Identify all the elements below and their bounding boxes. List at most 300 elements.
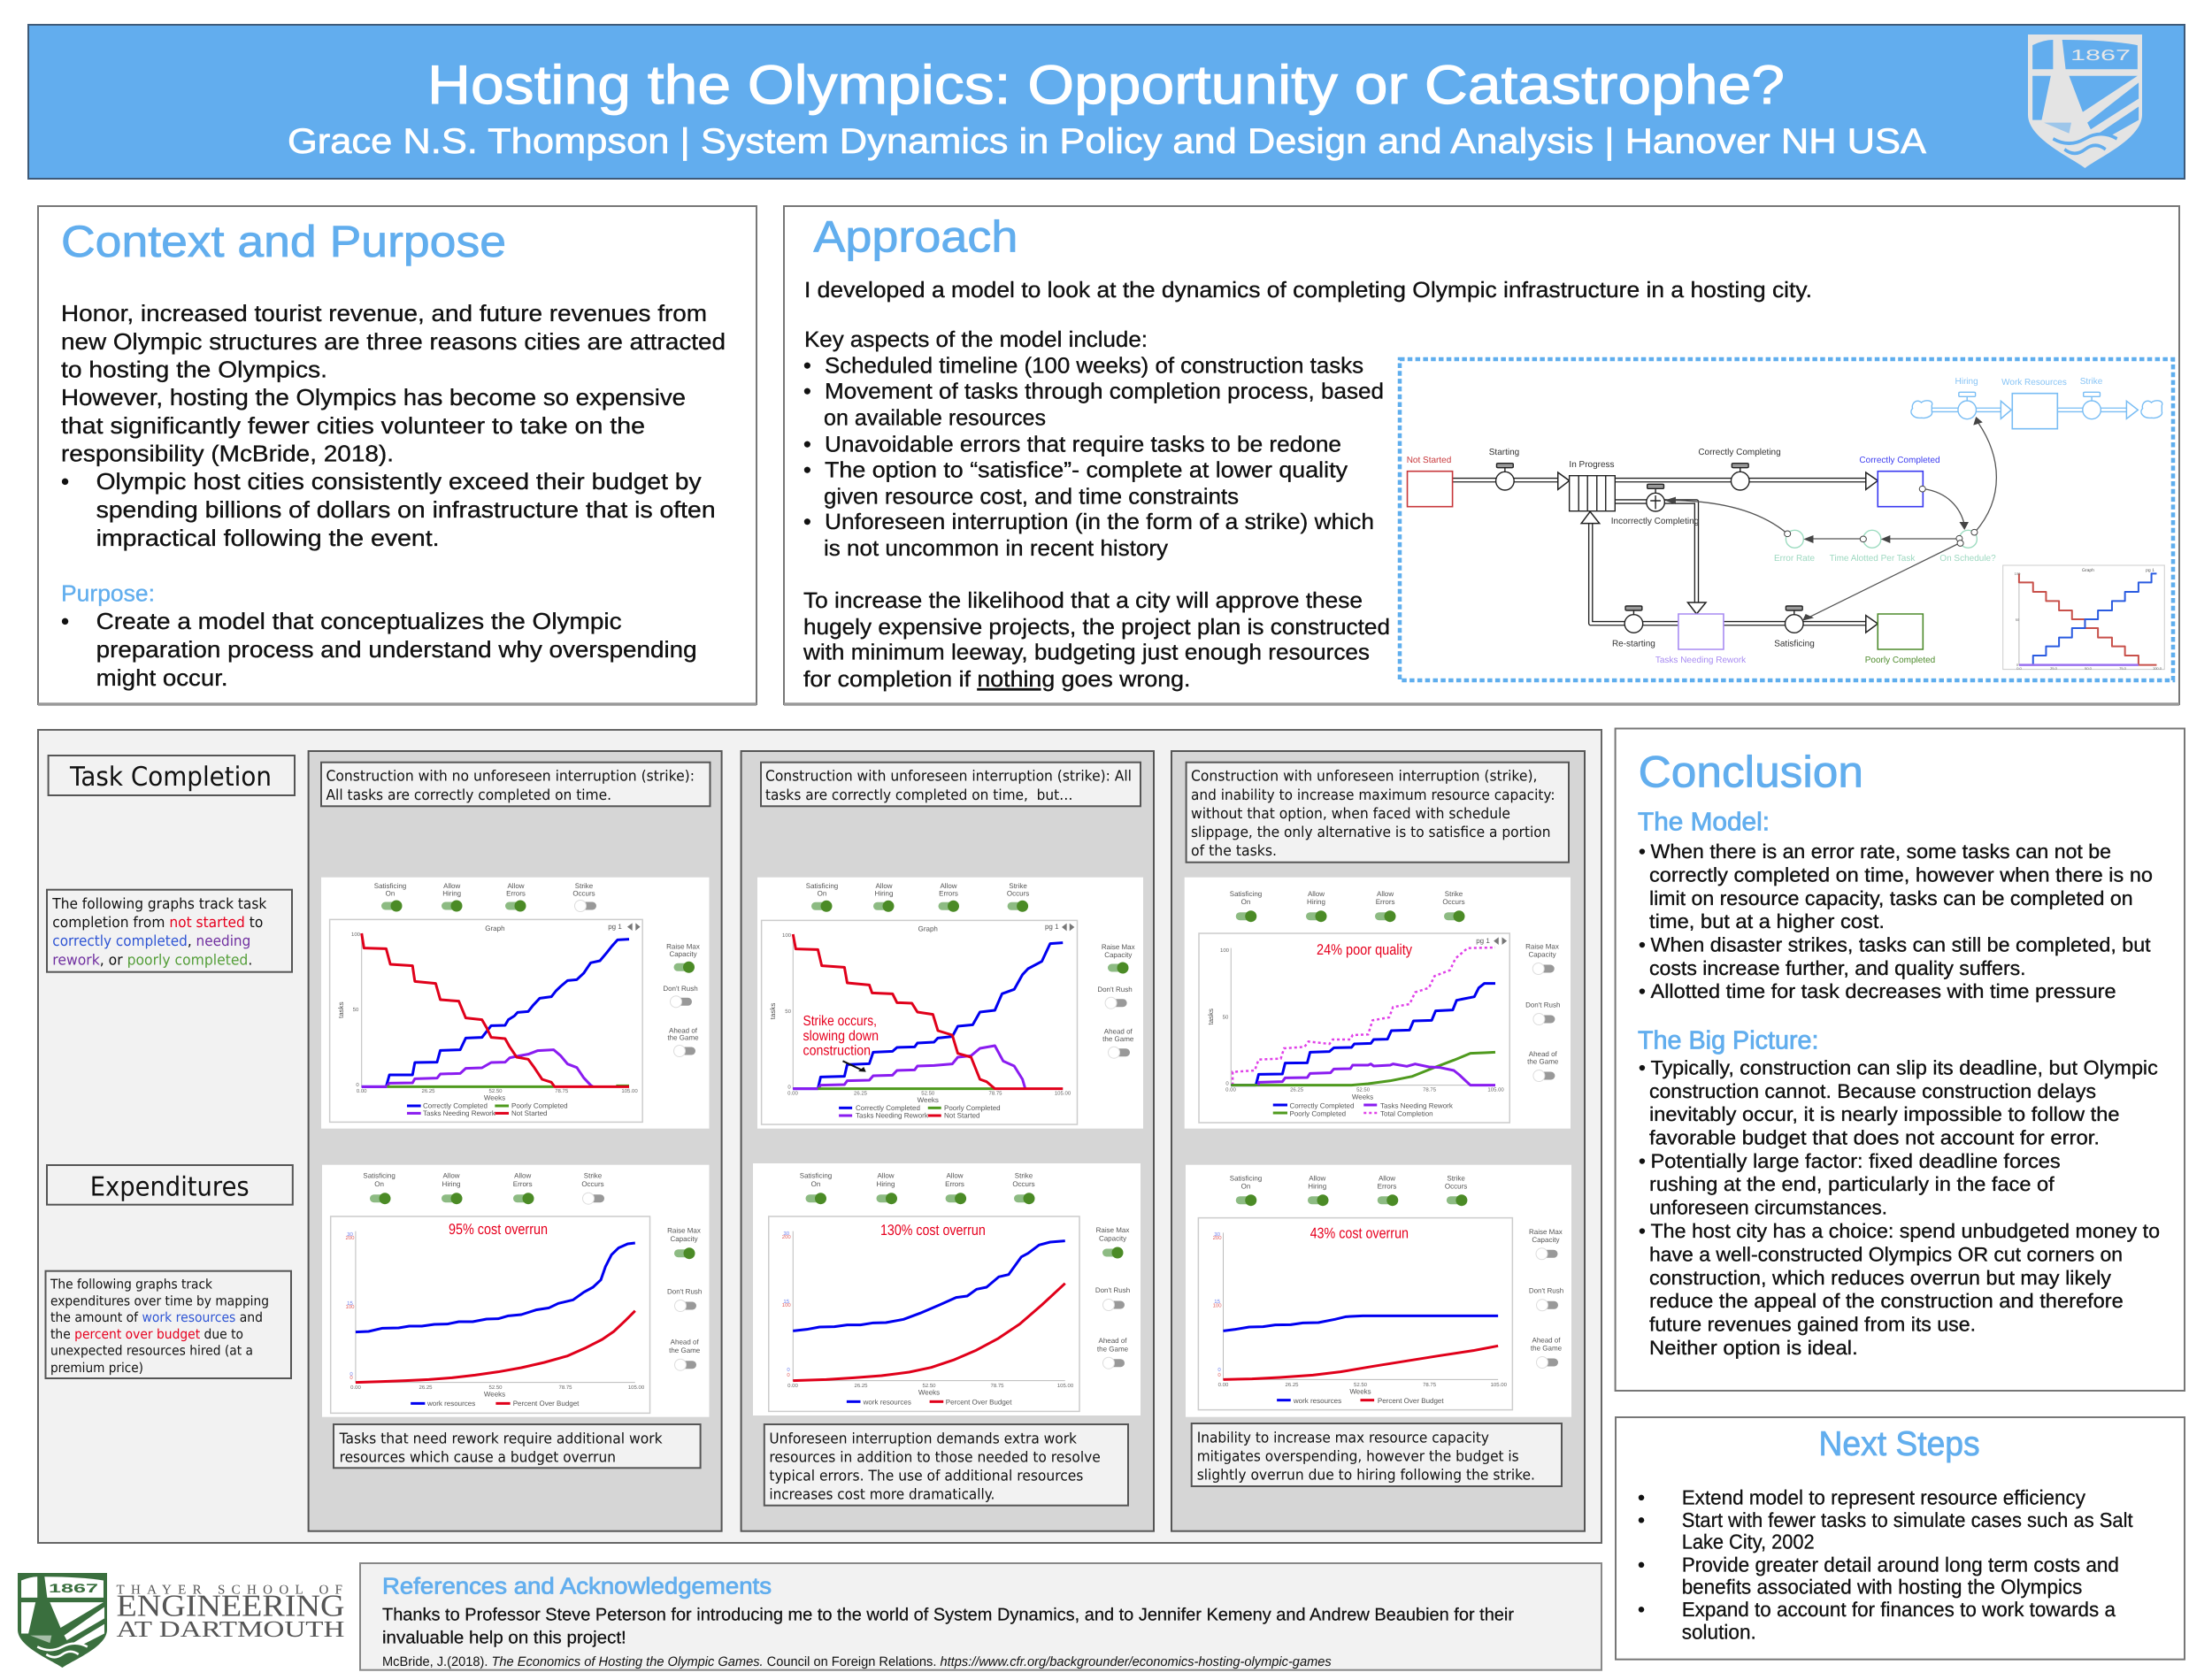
context text: Olympic host cities consistently exceed their budget by <box>96 468 702 495</box>
approach text: To increase the likelihood that a city will approve these <box>803 588 1363 613</box>
graph labels: Correctly Completed <box>856 1104 920 1112</box>
graph labels: 50 <box>353 1007 359 1013</box>
graph labels: Correctly Completed <box>423 1102 488 1110</box>
panel: results <box>38 730 1601 1543</box>
big picture bullets: reduce the appeal of the construction and therefore <box>1649 1290 2124 1312</box>
diagram labels: Hiring <box>1955 377 1978 387</box>
conveyor: in progress <box>1570 476 1615 511</box>
next steps bullets: • <box>1638 1508 1645 1531</box>
approach text: given resource cost, and time constraints <box>824 484 1239 509</box>
next steps bullets: Provide greater detail around long term costs and <box>1682 1553 2119 1576</box>
plotted lines <box>1198 1218 1512 1410</box>
diagram labels: 50 <box>2016 618 2020 622</box>
valves <box>1496 464 1803 633</box>
connector arrowheads <box>1664 417 1983 621</box>
connectors <box>1675 422 1996 617</box>
graph labels: work resources <box>1293 1397 1341 1405</box>
chart: tasks no strike <box>321 878 710 1129</box>
graph labels: 30 <box>347 1231 353 1238</box>
graph labels: 100 <box>345 1304 355 1310</box>
graph labels: 105.00 <box>1055 1091 1071 1097</box>
graph labels: pg 1 <box>1045 923 1059 931</box>
caption: capacity mitigates: mitigates overspending, however the budget is <box>1197 1448 1519 1465</box>
panel: conclusion <box>1616 729 2185 1391</box>
graph labels <box>1213 1231 1508 1405</box>
next steps bullets: • <box>1638 1486 1645 1509</box>
note: task completion: The following graphs track task <box>51 895 267 912</box>
context text: new Olympic structures are three reasons cities are attracted <box>61 328 726 355</box>
graph labels: 105.00 <box>1057 1383 1074 1389</box>
annotation: strike occurs: construction <box>803 1044 871 1059</box>
wordmark: THAYER SCHOOL OF <box>117 1584 342 1598</box>
big picture bullets: unforeseen circumstances. <box>1649 1197 1887 1219</box>
diagram labels: pg 1 <box>2146 568 2154 573</box>
next steps bullets: Expand to account for finances to work towards a <box>1682 1598 2116 1621</box>
graph labels: 105.00 <box>621 1088 638 1094</box>
graph labels: 30 <box>783 1231 790 1237</box>
graph labels: Poorly Completed <box>944 1104 1001 1112</box>
icon: green shield: 1867 <box>49 1581 98 1595</box>
graph labels: 200 <box>1213 1235 1222 1241</box>
graph labels: 52.50 <box>1356 1086 1371 1093</box>
diagram labels: Tasks Needing Rework <box>1655 656 1747 665</box>
toggle controls: Errors <box>1376 898 1394 906</box>
diagram labels: Work Resources <box>2001 378 2067 387</box>
approach text: • <box>803 354 811 379</box>
toggle controls: the Game <box>669 1346 701 1354</box>
toggle controls: Hiring <box>1308 1182 1326 1190</box>
graph labels: tasks <box>337 1001 345 1018</box>
context text: • <box>61 468 69 495</box>
graph labels: 0 <box>1217 1372 1221 1378</box>
graph labels: Percent Over Budget <box>946 1398 1012 1406</box>
graph labels: 200 <box>345 1235 355 1241</box>
panel: column no strike <box>309 751 722 1531</box>
toggle controls: Raise Max <box>1529 1228 1563 1236</box>
heading: task completion <box>49 756 295 795</box>
graph labels: pg 1 <box>1476 937 1490 945</box>
toggle controls: Satisficing <box>1230 1174 1262 1182</box>
graph labels <box>782 1231 1074 1406</box>
toggle controls: Allow <box>507 882 525 890</box>
toggle controls: Occurs <box>1012 1180 1035 1188</box>
heading: expenditures <box>47 1165 293 1205</box>
graph labels: Correctly Completed <box>1290 1101 1354 1109</box>
toggle controls: Ahead of <box>671 1339 699 1346</box>
toggle controls: Allow <box>1309 1174 1326 1182</box>
graph labels: 0.00 <box>357 1088 367 1094</box>
inset graph <box>2003 565 2164 670</box>
icon: college shield: 1867 <box>2070 47 2131 64</box>
purpose text: preparation process and understand why overspending <box>96 636 697 663</box>
toggle controls <box>800 1172 1130 1369</box>
graph labels: 52.50 <box>488 1088 503 1094</box>
diagram labels: Satisficing <box>1774 640 1815 649</box>
caption: no strike <box>321 763 710 806</box>
context text: to hosting the Olympics. <box>61 356 327 382</box>
diagram labels: Starting <box>1489 448 1519 457</box>
chart: tasks strike <box>757 878 1143 1129</box>
heading: task completion: Task Completion <box>69 762 272 793</box>
annotation: strike occurs: slowing down <box>803 1029 879 1044</box>
big picture bullets: construction, which reduces overrun but may likely <box>1649 1267 2112 1289</box>
graph labels: Not Started <box>944 1112 979 1120</box>
approach text: • <box>803 432 811 456</box>
chart: cost no strike <box>322 1165 710 1417</box>
next steps bullets: benefits associated with hosting the Olympics <box>1682 1576 2082 1599</box>
caption: extra resources: increases cost more dramatically. <box>769 1486 995 1503</box>
approach text: I developed a model to look at the dynamics of completing Olympic infrastructure in a hosting city. <box>804 278 1812 303</box>
caption: strike: tasks are correctly completed on time, but… <box>765 786 1072 803</box>
context text: that significantly fewer cities volunteer to take on the <box>61 412 645 439</box>
toggle controls: Strike <box>584 1172 603 1180</box>
note: expenditures: premium price) <box>50 1360 143 1376</box>
toggle controls: Occurs <box>1007 889 1029 897</box>
big picture bullets: • <box>1639 1056 1646 1079</box>
toggle controls: the Game <box>667 1034 699 1042</box>
graph labels: 0 <box>1217 1367 1221 1373</box>
approach text: Unforeseen interruption (in the form of a strike) which <box>825 510 1374 534</box>
graph labels: 0 <box>1225 1081 1229 1087</box>
toggle controls: Allow <box>514 1172 531 1180</box>
caption: no strike: Construction with no unforeseen interruption (strike): <box>326 768 695 785</box>
model bullets: limit on resource capacity, tasks can be completed on <box>1649 887 2133 909</box>
big picture bullets: Neither option is ideal. <box>1649 1337 1858 1359</box>
approach text: The option to “satisfice”- complete at lower quality <box>825 458 1348 483</box>
big picture bullets: The host city has a choice: spend unbudgeted money to <box>1651 1220 2160 1242</box>
toggle controls: the Game <box>1102 1035 1134 1043</box>
graph labels: Weeks <box>1352 1093 1373 1101</box>
approach text: is not uncommon in recent history <box>824 536 1169 561</box>
caption: strike and capacity: slippage, the only alternative is to satisfice a portion <box>1191 824 1550 840</box>
heading: Approach <box>813 212 1018 262</box>
approach text: Movement of tasks through completion process, based <box>825 380 1384 404</box>
graph labels: Weeks <box>1349 1387 1371 1395</box>
heading: Conclusion <box>1639 748 1863 797</box>
subtitle: Grace N.S. Thompson | System Dynamics in Policy and Design and Analysis | Hanover NH USA <box>288 122 1926 161</box>
annotation: 130% cost overrun <box>880 1222 986 1239</box>
caption: strike and capacity: of the tasks. <box>1191 842 1277 859</box>
model bullets: correctly completed on time, however when there is no <box>1649 864 2153 886</box>
approach text: • <box>803 510 811 534</box>
toggle controls: Satisficing <box>1230 890 1262 898</box>
toggle controls: Capacity <box>670 1235 698 1243</box>
graph labels: Tasks Needing Rework <box>423 1109 496 1117</box>
heading: References and Acknowledgements <box>382 1573 772 1599</box>
toggle controls: Allow <box>1308 890 1325 898</box>
next steps bullets: Start with fewer tasks to simulate cases such as Salt <box>1682 1508 2133 1531</box>
diagram labels: Incorrectly Completing <box>1611 517 1699 526</box>
toggle controls: Strike <box>1447 1174 1465 1182</box>
toggle controls: Allow <box>946 1172 964 1180</box>
toggle controls: Don't Rush <box>663 985 698 993</box>
graph labels: 78.75 <box>1423 1382 1437 1388</box>
toggle controls: Errors <box>1378 1182 1396 1190</box>
toggle controls: Errors <box>506 889 526 897</box>
toggle controls: Satisficing <box>363 1172 396 1180</box>
auxiliary variables <box>1786 530 1977 548</box>
toggle controls: the Game <box>1527 1058 1559 1066</box>
toggle controls: On <box>386 889 395 897</box>
approach text: Key aspects of the model include: <box>804 327 1148 352</box>
next steps bullets: • <box>1638 1553 1645 1576</box>
plotted lines <box>331 1216 650 1413</box>
approach text: Scheduled timeline (100 weeks) of construction tasks <box>825 354 1363 379</box>
graph labels: Poorly Completed <box>511 1102 568 1110</box>
model bullets: Allotted time for task decreases with time pressure <box>1651 980 2116 1002</box>
caption: rework: Tasks that need rework require additional work <box>339 1431 663 1447</box>
diagram labels: Time Alotted Per Task <box>1830 554 1916 564</box>
graph labels: 50 <box>785 1009 792 1015</box>
chart: cost strike <box>753 1163 1141 1415</box>
toggle controls: Strike <box>1445 890 1463 898</box>
toggle controls: Hiring <box>442 1180 460 1188</box>
caption: extra resources: resources in addition to those needed to resolve <box>769 1449 1101 1466</box>
caption: strike <box>761 763 1141 806</box>
big picture bullets: have a well-constructed Olympics OR cut corners on <box>1649 1244 2123 1265</box>
graph labels: tasks <box>1207 1009 1215 1025</box>
icon: green shield <box>18 1573 107 1668</box>
diagram labels: 0 <box>2016 663 2019 667</box>
toggle controls: Don't Rush <box>1097 986 1133 993</box>
panel: approach <box>784 206 2179 704</box>
wordmark: AT DARTMOUTH <box>117 1616 345 1642</box>
graph labels: 0.00 <box>350 1385 361 1391</box>
model bullets: • <box>1639 934 1646 956</box>
toggle controls <box>1230 890 1560 1081</box>
toggle controls: Errors <box>513 1180 533 1188</box>
toggle controls: Allow <box>877 1172 895 1180</box>
big picture bullets: inevitably occur, it is nearly impossible to follow the <box>1649 1103 2120 1125</box>
graph labels <box>1207 937 1504 1117</box>
plotted lines <box>330 919 642 1122</box>
graph labels: 26.25 <box>1285 1382 1299 1388</box>
model bullets <box>1639 840 2153 1002</box>
chart: tasks strike capacity <box>1185 878 1571 1129</box>
graph labels: 0.00 <box>787 1383 798 1389</box>
graph labels: 78.75 <box>990 1383 1004 1389</box>
graph labels: 50 <box>1223 1015 1229 1021</box>
resource valves and clouds <box>1911 392 2162 419</box>
graph labels: work resources <box>863 1398 911 1406</box>
graph labels: 105.00 <box>628 1385 645 1391</box>
toggle controls: Occurs <box>581 1180 604 1188</box>
system dynamics model diagram <box>1400 359 2173 680</box>
toggle controls: Ahead of <box>669 1026 698 1034</box>
note: task completion <box>47 890 292 972</box>
toggle controls: Ahead of <box>1532 1337 1561 1345</box>
toggle controls: Satisficing <box>374 882 406 890</box>
graph labels: 100 <box>782 932 792 939</box>
graph labels: Weeks <box>918 1096 939 1104</box>
diagram labels: 0.0 <box>2016 666 2023 671</box>
graph labels: Graph <box>485 924 505 932</box>
graph labels: 0.00 <box>1218 1382 1229 1388</box>
toggle controls: On <box>1241 898 1250 906</box>
purpose text: • <box>61 608 69 634</box>
panel: column strike <box>741 751 1154 1531</box>
annotation: 95% cost overrun <box>449 1221 548 1238</box>
diagram labels: 25.0 <box>2050 666 2058 671</box>
graph labels: 78.75 <box>555 1088 569 1094</box>
approach text: for completion if nothing goes wrong. <box>803 667 1191 692</box>
graph labels: Tasks Needing Rework <box>1380 1101 1454 1109</box>
toggle controls: Raise Max <box>666 943 700 951</box>
wordmark <box>117 1584 345 1642</box>
graph labels <box>337 923 638 1117</box>
toggle controls: Occurs <box>1442 898 1465 906</box>
thanks text: Thanks to Professor Steve Peterson for introducing me to the world of System Dynamics, and to Jennifer Kemeny and Andrew Beaubien for their <box>382 1606 1514 1625</box>
graph labels: 105.00 <box>1487 1086 1504 1093</box>
diagram labels: 100.0 <box>2153 666 2162 671</box>
annotation: strike occurs <box>803 1014 879 1059</box>
next steps bullets: Extend model to represent resource efficiency <box>1682 1486 2085 1509</box>
model bullets: When disaster strikes, tasks can still be completed, but <box>1651 934 2151 956</box>
annotation: 43% cost overrun <box>1310 1224 1409 1241</box>
toggle controls: On <box>811 1180 820 1188</box>
caption: strike and capacity: Construction with unforeseen interruption (strike), <box>1191 768 1538 785</box>
citation: McBride, J.(2018). The Economics of Hosting the Olympic Games. Council on Foreign Relations. https://www.cfr.org/backgrounder/economics-hosting-olympic-games <box>382 1654 1332 1669</box>
approach text: • <box>803 458 811 483</box>
graph labels: Weeks <box>484 1391 505 1399</box>
plotted lines <box>762 920 1078 1124</box>
stocks <box>1408 394 2057 649</box>
toggle controls: Strike <box>575 882 594 890</box>
caption: extra resources: typical errors. The use of additional resources <box>769 1467 1083 1484</box>
context text <box>61 300 726 551</box>
context text: Honor, increased tourist revenue, and future revenues from <box>61 300 707 326</box>
caption: extra resources: Unforeseen interruption demands extra work <box>769 1431 1077 1447</box>
toggle controls <box>1230 1174 1563 1368</box>
graph labels <box>769 923 1071 1120</box>
diagram labels: Graph <box>2082 568 2094 573</box>
graph labels: tasks <box>769 1003 777 1019</box>
toggle controls: Don't Rush <box>667 1287 702 1295</box>
graph labels: 52.50 <box>921 1091 935 1097</box>
toggle controls: Allow <box>940 882 957 890</box>
toggle controls: Hiring <box>1307 898 1325 906</box>
context text: However, hosting the Olympics has become so expensive <box>61 384 686 410</box>
big picture bullets <box>1639 1056 2160 1359</box>
toggle controls: Raise Max <box>667 1227 701 1235</box>
purpose text <box>61 608 697 691</box>
next steps bullets: solution. <box>1682 1621 1756 1644</box>
graph labels: 52.50 <box>488 1385 503 1391</box>
toggle controls: Capacity <box>1104 951 1132 959</box>
chart: cost strike capacity <box>1186 1165 1571 1417</box>
purpose heading: Purpose: <box>61 580 155 607</box>
note: task completion: rework, or poorly completed. <box>52 952 252 969</box>
toggle controls: Hiring <box>442 889 461 897</box>
purpose text: might occur. <box>96 664 228 691</box>
toggle controls: Occurs <box>1445 1182 1467 1190</box>
toggle controls: Allow <box>1377 890 1394 898</box>
plotted lines <box>1199 933 1509 1123</box>
big picture bullets: Potentially large factor: fixed deadline forces <box>1651 1150 2061 1172</box>
graph labels: 105.00 <box>1491 1382 1508 1388</box>
note: expenditures: the percent over budget due to <box>50 1326 243 1342</box>
approach text: hugely expensive projects, the project plan is constructed <box>803 615 1390 640</box>
toggle controls: Strike <box>1015 1172 1033 1180</box>
model bullets: • <box>1639 980 1646 1002</box>
stock and flow graphics <box>1408 392 2164 670</box>
note: expenditures: expenditures over time by mapping <box>50 1293 269 1309</box>
diagram labels: Poorly Completed <box>1865 656 1935 665</box>
panel: context and purpose <box>38 206 757 704</box>
model bullets: When there is an error rate, some tasks can not be <box>1651 840 2111 863</box>
graph labels: 78.75 <box>558 1385 572 1391</box>
caption: capacity mitigates <box>1192 1423 1562 1486</box>
subheading: the big picture: The Big Picture: <box>1638 1027 1819 1055</box>
flow arrowheads <box>1558 401 2138 633</box>
graph labels: 200 <box>782 1234 791 1240</box>
heading: Context and Purpose <box>61 217 506 266</box>
model bullets: time, but at a higher cost. <box>1649 910 1885 932</box>
graph labels: 0 <box>356 1082 359 1088</box>
graph labels: Tasks Needing Rework <box>856 1112 929 1120</box>
thanks text <box>382 1606 1514 1648</box>
purpose text: Create a model that conceptualizes the Olympic <box>96 608 622 634</box>
graph labels: 0 <box>349 1371 353 1377</box>
flows: task pipeline <box>1453 410 2128 624</box>
approach text: on available resources <box>824 406 1046 431</box>
panel: references and acknowledgements <box>360 1563 1601 1670</box>
heading: expenditures: Expenditures <box>90 1172 250 1203</box>
context text: spending billions of dollars on infrastructure that is often <box>96 496 716 523</box>
graph labels: 15 <box>1214 1299 1221 1305</box>
graph labels: 15 <box>783 1299 790 1305</box>
note: expenditures <box>46 1271 291 1378</box>
next steps bullets: Lake City, 2002 <box>1682 1530 1815 1553</box>
toggle controls: Ahead of <box>1104 1028 1133 1036</box>
big picture bullets: construction cannot. Because construction delays <box>1649 1080 2096 1102</box>
toggle controls: Raise Max <box>1525 943 1559 951</box>
graph labels: 0 <box>787 1085 791 1091</box>
diagram labels: 100 <box>2015 572 2021 576</box>
toggle controls <box>374 882 700 1056</box>
graph labels: work resources <box>426 1400 475 1408</box>
context text: impractical following the event. <box>96 525 440 551</box>
annotation: strike occurs: Strike occurs, <box>803 1014 877 1029</box>
toggle controls: Allow <box>875 882 893 890</box>
graph labels: 30 <box>1214 1231 1221 1238</box>
thanks text: invaluable help on this project! <box>382 1629 626 1648</box>
toggle controls: Allow <box>442 1172 460 1180</box>
annotation: 24% poor quality <box>1317 941 1412 958</box>
diagram labels <box>1407 377 2162 671</box>
toggle controls: Errors <box>945 1180 964 1188</box>
note: expenditures: The following graphs track <box>50 1277 212 1293</box>
graph labels: 52.50 <box>922 1383 936 1389</box>
graph labels: 0 <box>349 1375 353 1381</box>
caption: strike and capacity <box>1187 763 1569 863</box>
approach text <box>803 278 1812 692</box>
connector origin dots <box>1785 486 1978 546</box>
model bullets: costs increase further, and quality suffers. <box>1649 957 2026 979</box>
caption: strike: Construction with unforeseen interruption (strike): All <box>765 768 1132 785</box>
graph labels: Percent Over Budget <box>513 1400 580 1408</box>
next steps bullets: • <box>1638 1598 1645 1621</box>
graph labels: Poorly Completed <box>1290 1109 1346 1117</box>
graph labels: Total Completion <box>1380 1109 1433 1117</box>
toggle controls <box>363 1172 702 1370</box>
graph labels: 100 <box>782 1302 791 1308</box>
diagram labels: On Schedule? <box>1939 554 1996 564</box>
graph labels: 26.25 <box>854 1091 868 1097</box>
diagram labels: Strike <box>2080 377 2103 387</box>
panel: next steps <box>1616 1417 2185 1660</box>
heading: Next Steps <box>1819 1425 1980 1463</box>
